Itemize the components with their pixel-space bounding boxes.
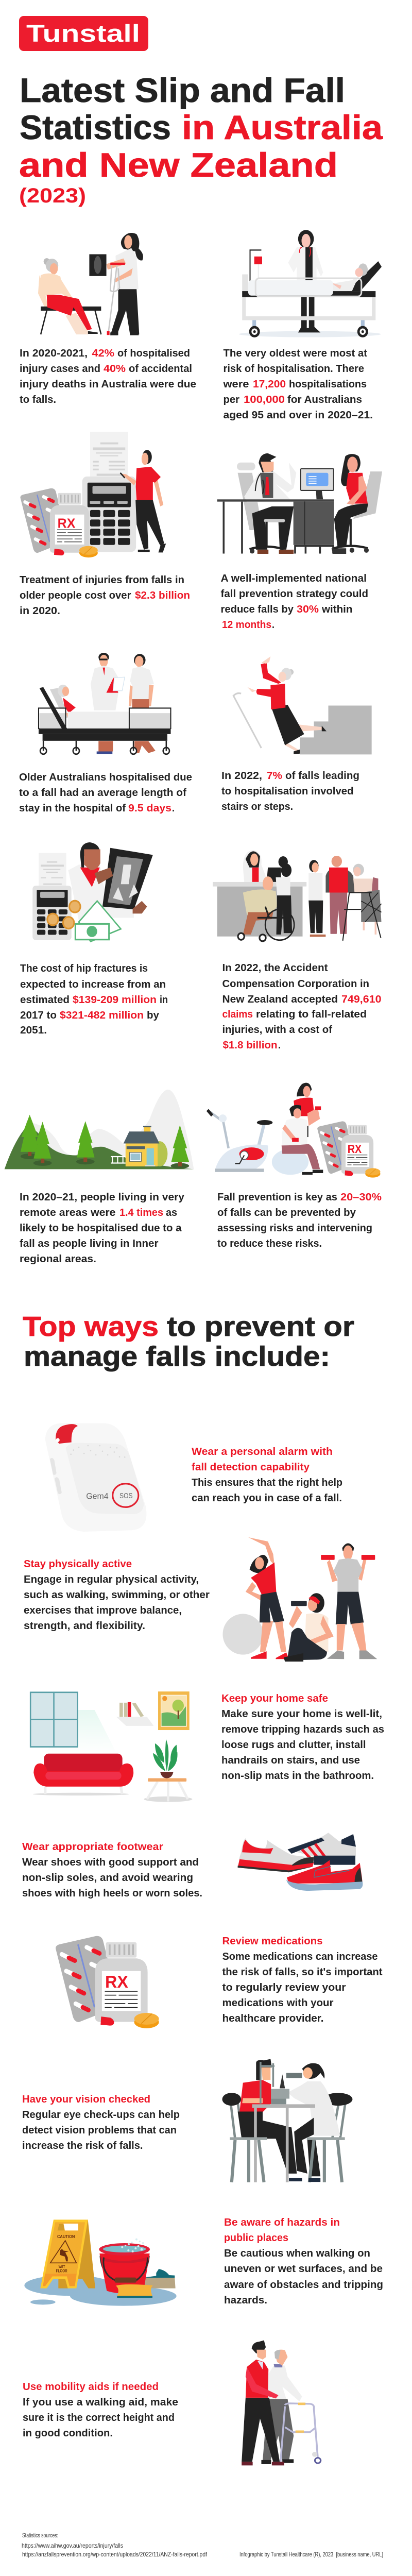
text: keep your home safe: Make sure your home is well-lit, — [221, 1708, 382, 1720]
text: ACC claims: New Zealand accepted — [222, 993, 338, 1005]
text: stairs or steps: 7% — [267, 770, 282, 782]
illustration: reception desk with carers and older people — [213, 850, 382, 941]
text: the very oldest: hospitalisations — [289, 378, 367, 390]
text: very remote areas: likely to be hospitalised due to a — [20, 1222, 182, 1234]
heading: top ways: to prevent or — [167, 1311, 354, 1342]
illustration: carer helping man with walking frame — [242, 2341, 321, 2465]
text: stay physically active: exercises that improve balance, — [24, 1604, 182, 1616]
illustration: wet floor sign, bucket and brush: FLOOR — [56, 2269, 67, 2274]
logo: Tunstall: Tunstall — [26, 20, 140, 47]
text: fall prevention — [217, 1191, 382, 1249]
text: length of stay: Older Australians hospitalised due — [19, 771, 192, 783]
text: 42% of hospitalised injury — [20, 347, 196, 405]
text: hip fracture costs: $139-209 million — [73, 994, 157, 1006]
text: stairs or steps: to hospitalisation involved — [221, 785, 353, 797]
title: (2023) — [19, 184, 86, 207]
text: review medications: medications with your — [222, 1997, 334, 2009]
title: Latest Slip and Fall — [20, 71, 345, 109]
text: review medications: to regularly review your — [222, 1981, 346, 1993]
text: hazards in public places: Be aware of hazards in — [224, 2216, 340, 2228]
text: national fall prevention strategy: fall prevention strategy could — [220, 588, 368, 600]
text: national fall prevention strategy — [220, 572, 368, 631]
text: hazards in public places: public places — [224, 2232, 288, 2244]
text: ACC claims: claims — [222, 1008, 253, 1020]
text: ACC claims: In 2022, the Accident — [222, 962, 328, 974]
text: stay physically active — [24, 1558, 210, 1632]
text: mobility aids: sure it is the correct height and — [23, 2412, 175, 2424]
text: hazards in public places: Be cautious when walking on — [224, 2247, 370, 2259]
illustration: medication: RX — [105, 1972, 128, 1991]
title: Statistics — [20, 108, 171, 146]
text: hip fracture costs: expected to increase from an — [20, 978, 166, 990]
text: the very oldest: risk of hospitalisation. There — [224, 363, 364, 375]
text: 42% of hospitalised injury: injury deaths in Australia were due — [20, 378, 196, 390]
text: very remote areas: 1.4 times — [119, 1207, 163, 1218]
text: national fall prevention strategy: . — [272, 619, 274, 631]
text: treatment of injuries: Treatment of injuries from falls in — [20, 574, 184, 586]
text: national fall prevention strategy: 12 months — [222, 619, 271, 631]
text: the very oldest — [222, 347, 373, 421]
illustration: hospital bed and doctor — [239, 230, 382, 337]
illustration: shoes — [238, 1833, 363, 1891]
text: treatment of injuries — [20, 574, 190, 617]
text: treatment of injuries: older people cost over — [20, 589, 131, 601]
text: keep your home safe: remove tripping hazards such as — [221, 1723, 384, 1735]
heading: top ways: Top ways — [23, 1311, 159, 1342]
text: hazards in public places: uneven or wet surfaces, and be — [224, 2263, 383, 2275]
text: mobility aids: If you use a walking aid, make — [23, 2396, 178, 2408]
text: national fall prevention strategy: within — [321, 603, 352, 615]
text: fall prevention: Fall prevention is key as — [217, 1191, 337, 1203]
illustration: medicine, calculator and man in red — [20, 432, 166, 557]
text: appropriate footwear: Wear shoes with good support and — [22, 1856, 199, 1868]
text: stairs or steps: In 2022, — [221, 770, 262, 782]
illustration: patient in bed with clinicians — [39, 653, 171, 754]
text: review medications: Some medications can increase — [222, 1951, 378, 1962]
illustration: wet floor sign, bucket and brush: CAUTION — [57, 2234, 75, 2239]
text: very remote areas — [20, 1191, 185, 1265]
text: review medications: healthcare provider. — [222, 2012, 323, 2024]
text: keep your home safe: handrails on stairs, and use — [221, 1754, 360, 1766]
text: vision checked: Have your vision checked — [22, 2093, 150, 2105]
text: personal alarm — [192, 1446, 342, 1504]
text: keep your home safe: loose rugs and clutter, install — [221, 1739, 366, 1751]
text: ACC claims: injuries, with a cost of — [222, 1024, 332, 1036]
title — [19, 71, 383, 207]
text: mobility aids — [23, 2381, 178, 2439]
text: hip fracture costs: by — [147, 1009, 160, 1021]
text: very remote areas: as — [166, 1207, 177, 1218]
text: hip fracture costs: 2051. — [20, 1024, 47, 1036]
text: vision checked: detect vision problems that can — [22, 2124, 177, 2136]
text: fall prevention: 20–30% — [340, 1191, 382, 1203]
text: stay physically active: Engage in regular physical activity, — [24, 1573, 199, 1585]
text: fall prevention: of falls can be prevented by — [217, 1207, 356, 1218]
illustration: medicine, calculator and man in red: RX — [58, 517, 76, 531]
text: hip fracture costs: 2017 to — [20, 1009, 57, 1021]
text: keep your home safe — [221, 1692, 384, 1782]
text: 42% of hospitalised injury: to falls. — [20, 394, 56, 405]
illustration: personal alarm device — [45, 1423, 146, 1532]
text: the very oldest: 17,200 — [253, 378, 286, 390]
illustration: sofa and plant — [33, 1739, 192, 1802]
text: mobility aids: Use mobility aids if needed — [23, 2381, 159, 2393]
text: the very oldest: 100,000 — [244, 394, 285, 405]
text: 42% of hospitalised injury: In 2020-2021, — [20, 347, 88, 359]
heading: top ways: manage falls include: — [24, 1341, 330, 1372]
text: review medications: the risk of falls, so it's important — [222, 1966, 383, 1978]
text: personal alarm: This ensures that the right help — [192, 1477, 342, 1488]
text: the very oldest: per — [224, 394, 239, 405]
text: national fall prevention strategy: 30% — [297, 603, 319, 615]
text: personal alarm: fall detection capability — [192, 1461, 310, 1473]
text: ACC claims: relating to fall-related — [256, 1008, 367, 1020]
illustration: personal alarm device: SOS — [119, 1492, 133, 1500]
text: length of stay: . — [172, 802, 175, 814]
text: the very oldest: for Australians — [287, 394, 362, 405]
text: treatment of injuries: in 2020. — [20, 605, 60, 617]
text: the very oldest: The very oldest were most at — [224, 347, 367, 359]
text: keep your home safe: Keep your home safe — [221, 1692, 328, 1704]
title: in Australia — [182, 108, 383, 146]
sources: https://anzfallsprevention.org/wp-content/uploads/2022/11/ANZ-falls-report.pdf — [22, 2551, 208, 2558]
text: mobility aids: in good condition. — [23, 2427, 113, 2439]
text: length of stay: stay in the hospital of — [19, 802, 126, 814]
illustration: safe home — [30, 1691, 190, 1754]
text: ACC claims: $1.8 billion — [222, 1039, 277, 1051]
sources — [22, 2532, 208, 2558]
illustration: people exercising — [222, 1537, 377, 1662]
text: the very oldest: aged 95 and over in 2020–21. — [224, 409, 373, 421]
illustration: personal alarm device: Gem4 — [86, 1492, 109, 1501]
text: hip fracture costs: in — [160, 994, 168, 1006]
text: length of stay: 9.5 days — [128, 802, 171, 814]
text: appropriate footwear: shoes with high heels or worn soles. — [22, 1887, 202, 1899]
text: very remote areas: In 2020–21, people living in very — [20, 1191, 185, 1203]
text: national fall prevention strategy: A well-implemented national — [220, 572, 367, 584]
text: personal alarm: Wear a personal alarm with — [192, 1446, 333, 1458]
text: the very oldest: were — [222, 378, 249, 390]
illustration: doctor and patient at desk — [217, 453, 382, 554]
illustration: woman falling on stairs — [233, 656, 372, 754]
text: national fall prevention strategy: reduce falls by — [220, 603, 294, 615]
text: very remote areas: regional areas. — [20, 1253, 96, 1265]
text: review medications — [222, 1935, 383, 2024]
text: stairs or steps: of falls leading — [285, 770, 359, 782]
heading: top ways — [23, 1311, 354, 1372]
text: hazards in public places: aware of obstacles and tripping — [224, 2279, 383, 2291]
text: fall prevention: to reduce these risks. — [217, 1238, 322, 1249]
text: hazards in public places — [224, 2216, 383, 2306]
text: 42% of hospitalised injury: injury cases and — [20, 363, 100, 375]
text: appropriate footwear: Wear appropriate footwear — [22, 1841, 163, 1853]
text: treatment of injuries: $2.3 billion — [135, 589, 190, 601]
logo: Tunstall — [19, 16, 148, 51]
text: hazards in public places: hazards. — [224, 2294, 267, 2306]
text: 42% of hospitalised injury: 40% — [104, 363, 126, 375]
sources: Statistics sources: — [22, 2532, 58, 2539]
text: very remote areas: fall as people living in Inner — [20, 1238, 159, 1249]
text: ACC claims: Compensation Corporation in — [222, 978, 369, 990]
text: ACC claims — [222, 962, 381, 1051]
text: very remote areas: remote areas were — [20, 1207, 115, 1218]
illustration: exercise bike, physio and medicine — [208, 1083, 381, 1178]
title: and New Zealand — [19, 146, 338, 184]
text: review medications: Review medications — [222, 1935, 322, 1947]
text: hip fracture costs: estimated — [20, 994, 70, 1006]
text: ACC claims: . — [278, 1039, 281, 1051]
text: stairs or steps — [221, 770, 359, 812]
text: stay physically active: such as walking, swimming, or other — [24, 1589, 210, 1601]
text: 42% of hospitalised injury: 42% — [92, 347, 114, 359]
illustration: medication — [56, 1936, 159, 2028]
text: appropriate footwear: non-slip soles, and avoid wearing — [22, 1872, 193, 1884]
illustration: wet floor sign, bucket and brush: WET — [59, 2265, 65, 2269]
text: length of stay — [19, 771, 192, 814]
text: hip fracture costs: The cost of hip fractures is — [20, 962, 148, 974]
text: vision checked: increase the risk of falls. — [22, 2140, 143, 2151]
text: stairs or steps: stairs or steps. — [221, 801, 293, 812]
illustration: hip fracture costs, doctor with x-ray — [32, 842, 153, 941]
text: hip fracture costs: $321-482 million — [60, 1009, 144, 1021]
text: keep your home safe: non-slip mats in the bathroom. — [221, 1770, 374, 1782]
text: fall prevention: assessing risks and intervening — [217, 1222, 372, 1234]
text: 42% of hospitalised injury: of hospitalised — [117, 347, 190, 359]
sources: https://www.aihw.gov.au/reports/injury/falls — [22, 2542, 123, 2549]
text: vision checked: Regular eye check-ups can help — [22, 2109, 180, 2121]
text: 42% of hospitalised injury: of accidental — [129, 363, 192, 375]
text: stay physically active: Stay physically active — [24, 1558, 132, 1570]
illustration: eye examination — [222, 2059, 352, 2182]
illustration: exercise bike, physio and medicine: RX — [348, 1142, 362, 1156]
text: personal alarm: can reach you in case of a fall. — [192, 1492, 342, 1504]
text: appropriate footwear — [22, 1841, 202, 1899]
text: ACC claims: 749,610 — [341, 993, 381, 1005]
text: length of stay: to a fall had an average length of — [19, 787, 186, 799]
text: stay physically active: strength, and flexibility. — [24, 1620, 145, 1632]
illustration: wet floor sign, bucket and brush — [24, 2219, 177, 2306]
illustration: seated patient and nurse with x-ray — [38, 233, 143, 335]
text: vision checked — [22, 2093, 180, 2151]
text: hip fracture costs — [20, 962, 168, 1036]
illustration: remote landscape with house — [5, 1090, 194, 1169]
